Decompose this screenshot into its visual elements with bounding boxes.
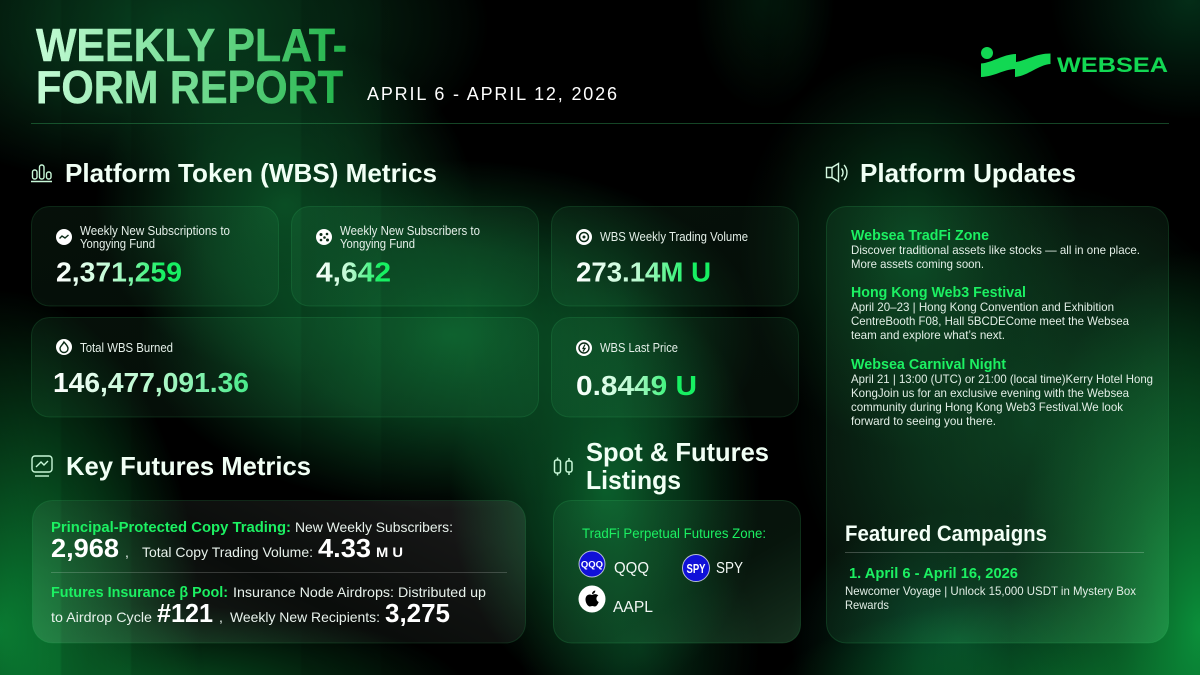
icon: SPY [682, 554, 710, 582]
icon: QQQ: QQQ [581, 560, 603, 570]
section: Platform Updates heading: Platform Updates [860, 158, 1076, 188]
panel: last price: 0.8449 U [576, 370, 697, 401]
copy trading row: 2,968 [51, 533, 119, 563]
update: Carnival Night: April 21 | 13:00 (UTC) or 21:00 (local time)Kerry Hotel Hong [851, 372, 1153, 386]
insurance pool row: to Airdrop Cycle [51, 609, 152, 625]
campaign item: Rewards [845, 598, 889, 612]
copy trading row: M U [376, 544, 403, 560]
update: TradFi Zone: Discover traditional assets like stocks — all in one place. [851, 243, 1140, 257]
section: Spot & Futures heading: Listings [586, 465, 681, 495]
panel: listings [554, 500, 800, 643]
section: Key Futures Metrics heading: Key Futures Metrics [66, 451, 311, 481]
panel: subscriptions: 2,371,259 [56, 256, 182, 288]
icon: candles [554, 458, 572, 476]
insurance pool row: 3,275 [385, 598, 450, 628]
panel: total burned: Total WBS Burned [80, 341, 173, 355]
panel: Key Futures Metrics [32, 500, 526, 643]
panel: total burned [32, 318, 538, 417]
insurance pool row: #121 [157, 598, 213, 628]
panel: listings: SPY [716, 560, 743, 577]
update: Hong Kong Web3 Festival: Hong Kong Web3 Festival [851, 285, 1026, 301]
panel: trading volume: WBS Weekly Trading Volume [600, 230, 748, 244]
icon: speaker [826, 164, 847, 182]
insurance pool row: , [219, 609, 223, 625]
icon: trend [56, 229, 72, 245]
section: Spot & Futures heading [554, 437, 769, 495]
insurance pool row: Insurance Node Airdrops: Distributed up [233, 584, 486, 600]
icon: Apple [578, 586, 606, 612]
update: Hong Kong Web3 Festival [851, 285, 1129, 342]
panel: subscriptions: Yongying Fund [80, 237, 155, 251]
update: Carnival Night: community during Hong Kong Web3 Festival.We look [851, 400, 1123, 414]
section: Spot & Futures heading: Spot & Futures [586, 437, 769, 467]
update: Carnival Night: KongJoin us for an exclusive evening with the Websea [851, 386, 1129, 400]
section: Platform Token metrics heading: Platform Token (WBS) Metrics [65, 158, 437, 188]
insurance pool row: Futures Insurance β Pool: [51, 585, 228, 601]
panel: subscribers: Yongying Fund [340, 237, 415, 251]
copy trading row: New Weekly Subscribers: [295, 519, 453, 535]
campaign item: Newcomer Voyage | Unlock 15,000 USDT in Mystery Box [845, 584, 1136, 598]
icon: flame [56, 339, 72, 355]
update: Hong Kong Web3 Festival: CentreBooth F08, Hall 5BCDECome meet the Websea [851, 314, 1129, 328]
campaign item [845, 566, 1136, 612]
copy trading row: , [125, 544, 129, 560]
icon: QQQ [579, 551, 605, 577]
update: Hong Kong Web3 Festival: April 20–23 | Hong Kong Convention and Exhibition [851, 300, 1114, 314]
copy trading row: Total Copy Trading Volume: [142, 544, 313, 560]
panel: listings: QQQ [614, 560, 649, 577]
update: Carnival Night: forward to seeing you there. [851, 414, 996, 428]
icon: monitor [32, 456, 52, 476]
copy trading row [51, 519, 453, 563]
icon: dots [316, 229, 332, 245]
panel: Platform Updates [826, 206, 1168, 643]
panel: last price: WBS Last Price [600, 341, 678, 355]
panel: subscriptions: Weekly New Subscriptions to [80, 224, 230, 238]
copy trading row: Principal-Protected Copy Trading: [51, 520, 291, 536]
panel: subscribers [292, 206, 538, 306]
update: TradFi Zone: More assets coming soon. [851, 257, 984, 271]
title [36, 19, 347, 113]
panel: subscriptions [32, 206, 278, 306]
update: Carnival Night [851, 357, 1153, 428]
icon: volume [576, 229, 592, 245]
date range: APRIL 6 - APRIL 12, 2026 [367, 84, 617, 104]
icon: bars [31, 165, 52, 182]
copy trading row: 4.33 [318, 533, 371, 563]
campaign item: 1. April 6 - April 16, 2026 [849, 566, 1018, 582]
logo: Websea: WEBSEA [1057, 53, 1168, 77]
panel: subscribers: 4,642 [316, 256, 391, 288]
title: FORM REPORT [36, 61, 343, 113]
insurance pool row: Weekly New Recipients: [230, 609, 380, 625]
update: TradFi Zone: Websea TradFi Zone [851, 228, 989, 244]
title: WEEKLY PLAT- [36, 19, 347, 71]
panel: listings: TradFi Perpetual Futures Zone: [582, 526, 766, 541]
icon: SPY: SPY [686, 561, 706, 576]
panel: trading volume: 273.14M U [576, 256, 711, 288]
update: Hong Kong Web3 Festival: team and explore what’s next. [851, 328, 1005, 342]
panel: last price [552, 318, 798, 417]
heading: Featured Campaigns: Featured Campaigns [845, 521, 1047, 546]
panel: trading volume [552, 206, 798, 306]
icon: price [576, 340, 592, 356]
panel: subscribers: Weekly New Subscribers to [340, 224, 480, 238]
panel: total burned: 146,477,091.36 [53, 367, 249, 398]
logo: Websea [981, 47, 1168, 77]
update: TradFi Zone [851, 228, 1140, 271]
panel: listings: AAPL [613, 599, 653, 616]
insurance pool row [51, 584, 486, 628]
update: Carnival Night: Websea Carnival Night [851, 357, 1006, 373]
